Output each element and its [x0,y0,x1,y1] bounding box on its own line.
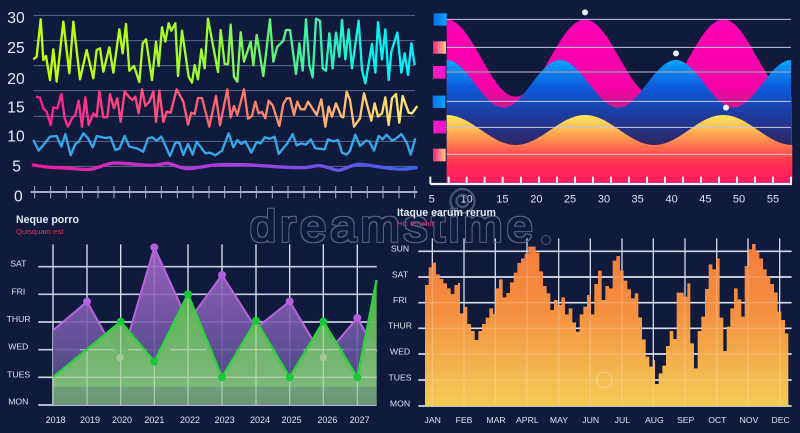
blue wave [447,60,791,183]
grid lines top right [447,19,792,154]
yellow wave [447,115,792,183]
grid lines bottom left [38,244,377,405]
faint grid over area [425,249,788,406]
month labels: AUG [645,415,664,425]
y axis labels top left: 30 [7,10,25,27]
weekday labels bottom right: SAT [392,269,409,279]
year labels [46,415,370,425]
year labels: 2019 [80,415,100,425]
year labels: 2018 [46,415,66,425]
year labels: 2021 [144,415,164,425]
weekday labels bottom right: THUR [388,321,412,331]
series: pink to yellow line [36,89,417,127]
x axis labels top right: 5 [429,193,435,205]
month labels: JUN [582,415,599,425]
weekday labels bottom right [388,244,412,408]
legend squares [433,13,447,161]
year labels: 2026 [317,415,337,425]
year labels: 2027 [350,415,370,425]
x axis labels top right: 45 [699,193,711,205]
weekday labels bottom left: THUR [7,314,31,324]
x axis labels top right: 20 [530,193,542,205]
weekday labels bottom right: WED [390,347,410,357]
weekday labels bottom left: WED [8,342,28,352]
weekday labels bottom right: SUN [391,244,409,254]
area chart: weekdays by year, bottom left [7,243,377,425]
y axis labels top left: 5 [12,159,21,176]
x axis labels top right: 30 [598,193,610,205]
purple area series [53,243,377,405]
pink wave [447,19,792,183]
series: blue line [33,133,415,156]
year labels: 2022 [180,415,200,425]
y axis labels top left: 20 [7,71,25,88]
x axis labels top right: 25 [564,193,576,205]
heading: Itaque earum rerum: Itaque earum rerum [397,207,496,219]
month labels: DEC [772,415,790,425]
weekday labels bottom left: FRI [11,286,25,296]
y axis labels top left [7,10,25,206]
month labels: MAR [486,415,506,425]
y axis labels top left: 25 [7,40,25,57]
x axis labels top right [429,193,779,205]
grid lines top left [33,15,415,166]
heading: Neque porro: Neque porro [16,214,80,226]
month labels: OCT [708,415,727,425]
y axis labels top left: 0 [14,189,23,206]
weekday labels bottom left [7,259,31,407]
orange stepped area [425,244,788,406]
faint circle marker [597,372,612,388]
marker dots [582,9,729,111]
weekday labels bottom left: SAT [10,259,27,269]
x axis labels top right: 15 [496,193,508,205]
weekday labels bottom right: FRI [393,295,407,305]
year labels: 2024 [250,415,270,425]
stepped area chart: weekdays by month, bottom right [388,238,792,425]
x axis labels top right: 40 [666,193,678,205]
weekday labels bottom right: MON [390,398,410,408]
series: green to cyan line [33,19,415,83]
x axis labels top right: 50 [733,193,745,205]
watermark wordmark: dreamstime [250,202,537,251]
year labels: 2025 [282,415,302,425]
green area series [38,280,377,405]
x axis labels top right: 55 [767,193,779,205]
watermark round logo [450,189,474,213]
x axis labels top right: 10 [461,193,473,205]
month labels: NOV [740,415,759,425]
weekday labels bottom left: MON [8,397,28,407]
subheading: Quisquam est: Quisquam est [16,227,64,236]
series: magenta to blue flat line [33,163,416,170]
y axis labels top left: 15 [7,99,25,116]
subheading: Hic tenetur: Hic tenetur [397,219,435,228]
x axis labels top right: 35 [632,193,644,205]
year labels: 2020 [112,415,132,425]
weekday labels bottom right: TUES [388,372,412,382]
line chart: four series, top left [7,10,417,206]
month labels: SEP [677,415,695,425]
y axis labels top left: 10 [7,129,25,146]
x axis with ticks [31,186,417,198]
weekday labels bottom left: TUES [7,369,30,379]
month labels: FEB [456,415,473,425]
month labels: MAY [550,415,568,425]
year labels: 2023 [215,415,235,425]
month labels: APRL [516,415,539,425]
grid lines bottom right [418,238,792,406]
watermark registered mark [542,236,550,244]
wave chart: top right [429,9,792,205]
month labels [424,415,790,425]
x axis comb [430,177,792,184]
month labels: JAN [424,415,441,425]
month labels: JUL [615,415,630,425]
